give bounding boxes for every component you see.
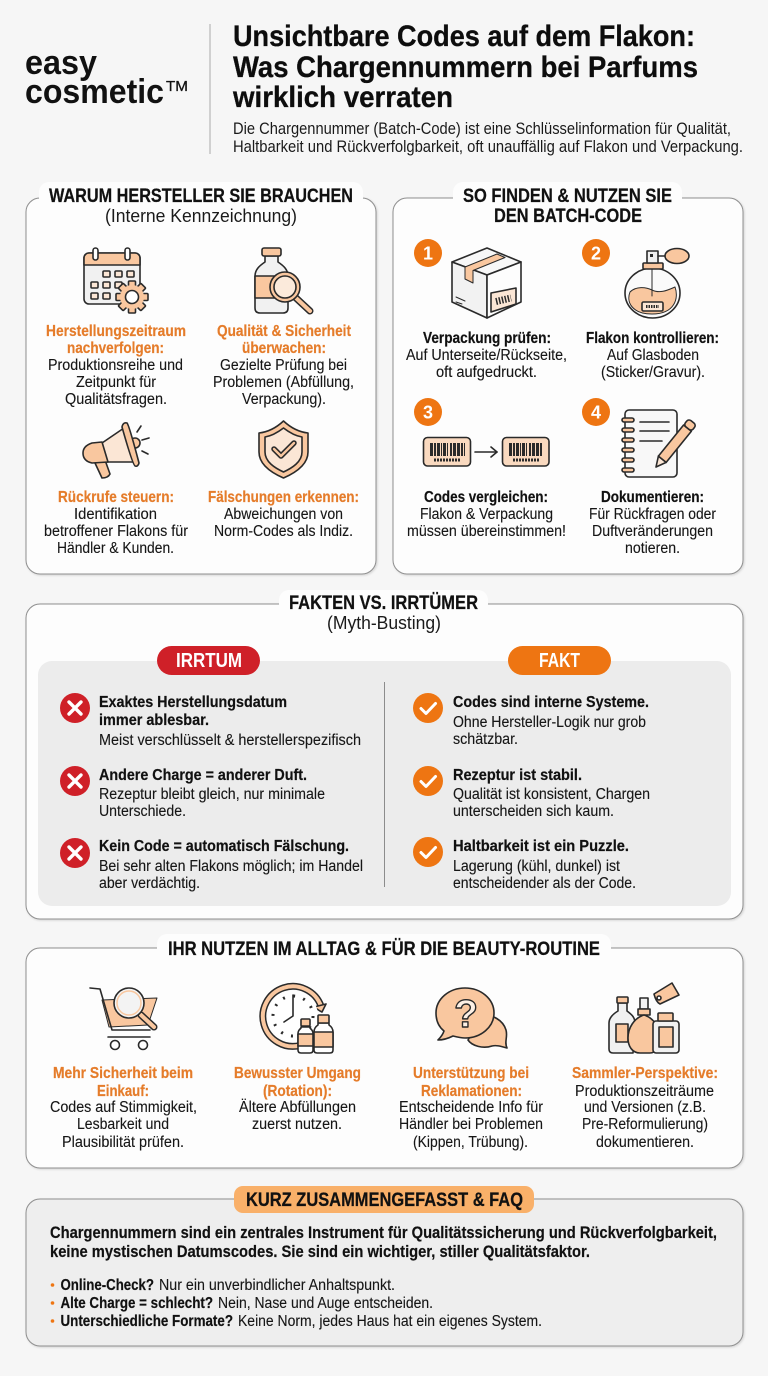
heading: so finden: SO FINDEN & NUTZEN SIE xyxy=(463,185,672,207)
icon: shield xyxy=(259,421,308,478)
myth 3 xyxy=(99,838,363,892)
icon: calendar with gear xyxy=(84,248,148,313)
text: mehr sicherheit: Codes auf Stimmigkeit, xyxy=(50,1099,197,1116)
text: faelschungen: Fälschungen erkennen: xyxy=(208,489,359,506)
text: codes vergleichen: Codes vergleichen: xyxy=(424,489,548,506)
logo: easy xyxy=(25,44,97,82)
fact 1: schätzbar. xyxy=(453,731,518,748)
fact 1 xyxy=(453,694,649,748)
badge 4 xyxy=(582,398,610,426)
text: bewusster umgang: (Rotation): xyxy=(263,1083,332,1100)
text: qualitaet und sicherheit: überwachen: xyxy=(242,340,326,357)
myth 3: Kein Code = automatisch Fälschung. xyxy=(99,838,349,855)
myth 1: immer ablesbar. xyxy=(99,712,209,729)
subtitle xyxy=(233,120,743,156)
text: unterstuetzung: Händler bei Problemen xyxy=(399,1116,543,1133)
panel: warum hersteller sie brauchen xyxy=(26,182,376,574)
badge 2 xyxy=(582,239,610,267)
heading: warum hersteller: WARUM HERSTELLER SIE BRAUCHEN xyxy=(49,185,353,207)
text: sammler-perspektive: Produktionszeiträume xyxy=(575,1083,714,1100)
text: rueckrufe: Identifikation xyxy=(74,506,157,523)
badge 1: 1 xyxy=(423,244,433,264)
title xyxy=(232,20,698,114)
text: flakon kontrollieren xyxy=(586,330,719,381)
text: verpackung pruefen xyxy=(406,330,567,381)
text: mehr sicherheit xyxy=(50,1065,197,1151)
icon: shopping cart with magnifier xyxy=(90,988,157,1050)
faq list: Unterschiedliche Formate? xyxy=(60,1313,233,1330)
faq list xyxy=(51,1277,542,1330)
comparison background xyxy=(38,661,731,906)
fact 2: unterscheiden sich kaum. xyxy=(453,803,614,820)
text: bewusster umgang: Bewusster Umgang xyxy=(234,1065,361,1082)
icon: orange check 3 xyxy=(413,837,443,867)
heading: so finden xyxy=(463,185,672,227)
fact 2: Qualität ist konsistent, Chargen xyxy=(453,786,650,803)
text: dokumentieren: notieren. xyxy=(625,540,680,557)
faq list: Online-Check? xyxy=(60,1277,154,1294)
text: verpackung pruefen: Verpackung prüfen: xyxy=(423,330,551,347)
icon: notebook and pen xyxy=(622,410,696,477)
heading: warum hersteller xyxy=(49,185,353,226)
panel: fakten vs irrtuemer xyxy=(26,590,743,919)
header xyxy=(25,20,743,156)
icon: speech bubbles with question mark: ? xyxy=(454,993,478,1036)
badge 3 xyxy=(414,398,442,426)
text: herstellungszeitraum: Herstellungszeitraum xyxy=(46,323,186,340)
fact 3: Haltbarkeit ist ein Puzzle. xyxy=(453,838,629,855)
icon: orange check 2 xyxy=(413,766,443,796)
heading: fakten vs irrtuemer: (Myth-Busting) xyxy=(327,613,441,633)
text: rueckrufe: betroffener Flakons für xyxy=(44,523,188,540)
icon: red cross 1 xyxy=(60,693,90,723)
myth 3: Bei sehr alten Flakons möglich; im Handel xyxy=(99,858,363,875)
myth 2 xyxy=(99,767,325,820)
myth 2: Andere Charge = anderer Duft. xyxy=(99,767,307,784)
text: sammler-perspektive: und Versionen (z.B. xyxy=(584,1099,706,1116)
text: unterstuetzung: Unterstützung bei xyxy=(413,1065,529,1082)
title: Was Chargennummern bei Parfums xyxy=(233,51,698,84)
icon: red cross 3 xyxy=(60,838,90,868)
text: rueckrufe xyxy=(44,489,188,557)
icon: package box xyxy=(452,248,521,318)
text: flakon kontrollieren: (Sticker/Gravur). xyxy=(601,364,705,381)
text: herstellungszeitraum xyxy=(46,323,186,408)
badge: fakt: FAKT xyxy=(539,650,580,672)
fact 1: Ohne Hersteller-Logik nur grob xyxy=(453,714,646,731)
text: dokumentieren: Dokumentieren: xyxy=(601,489,704,506)
badge: fakt xyxy=(508,646,611,675)
badge: irrtum xyxy=(157,646,260,675)
text: dokumentieren: Duftveränderungen xyxy=(592,523,713,540)
text: qualitaet und sicherheit: Qualität & Sicherheit xyxy=(217,323,351,340)
text: codes vergleichen: Flakon & Verpackung xyxy=(420,506,553,523)
text: unterstuetzung: (Kippen, Trübung). xyxy=(413,1134,528,1151)
panel: ihr nutzen im alltag xyxy=(26,934,743,1168)
text: verpackung pruefen: Auf Unterseite/Rückseite, xyxy=(406,347,567,364)
text: rueckrufe: Händler & Kunden. xyxy=(57,540,174,557)
text: faelschungen: Norm-Codes als Indiz. xyxy=(214,523,353,540)
badge 1 xyxy=(414,239,442,267)
badge: irrtum: IRRTUM xyxy=(176,650,242,672)
icon: megaphone xyxy=(83,423,149,478)
icon: red cross 2 xyxy=(60,766,90,796)
faq list: Keine Norm, jedes Haus hat ein eigenes System. xyxy=(238,1313,542,1330)
text: qualitaet und sicherheit: Verpackung). xyxy=(242,391,326,408)
badge: kurz zusammengefasst: KURZ ZUSAMMENGEFASST & FAQ xyxy=(246,1189,523,1211)
badge 2: 2 xyxy=(591,244,601,264)
panel: kurz zusammengefasst und faq xyxy=(26,1186,743,1346)
myth 1: Meist verschlüsselt & herstellerspezifisch xyxy=(99,732,361,749)
text: bewusster umgang: zuerst nutzen. xyxy=(252,1116,342,1133)
text: qualitaet und sicherheit: Gezielte Prüfung bei xyxy=(220,357,347,374)
logo: cosmetic xyxy=(25,73,164,111)
myth 2: Rezeptur bleibt gleich, nur minimale xyxy=(99,786,325,803)
text: mehr sicherheit: Lesbarkeit und xyxy=(77,1116,169,1133)
title: wirklich verraten xyxy=(232,81,453,114)
text: sammler-perspektive: dokumentieren. xyxy=(596,1134,694,1151)
text: mehr sicherheit: Mehr Sicherheit beim xyxy=(53,1065,193,1082)
icon: orange check 1 xyxy=(413,693,443,723)
text: verpackung pruefen: oft aufgedruckt. xyxy=(436,364,537,381)
text: rueckrufe: Rückrufe steuern: xyxy=(58,489,174,506)
icon: speech bubbles with question mark xyxy=(436,988,507,1048)
fact 2: Rezeptur ist stabil. xyxy=(453,767,582,784)
text: dokumentieren xyxy=(589,489,716,557)
text: codes vergleichen: müssen übereinstimmen! xyxy=(407,523,566,540)
myth 1: Exaktes Herstellungsdatum xyxy=(99,694,287,711)
text: faelschungen xyxy=(208,489,359,540)
text: qualitaet und sicherheit xyxy=(213,323,354,408)
text: dokumentieren: Für Rückfragen oder xyxy=(589,506,716,523)
heading: ihr nutzen: IHR NUTZEN IM ALLTAG & FÜR DIE BEAUTY-ROUTINE xyxy=(168,937,600,960)
text: flakon kontrollieren: Flakon kontrollieren: xyxy=(586,330,719,347)
logo: TM xyxy=(166,78,188,95)
text: bewusster umgang xyxy=(234,1065,361,1133)
heading: so finden: DEN BATCH-CODE xyxy=(494,205,642,227)
summary text: keine mystischen Datumscodes. Sie sind ein wichtiger, stiller Qualitätsfaktor. xyxy=(50,1242,590,1261)
text: herstellungszeitraum: Produktionsreihe und xyxy=(48,357,183,374)
icon: perfume flacon xyxy=(625,248,689,318)
icon: perfume collection with tag xyxy=(609,983,679,1053)
panel: so finden und nutzen xyxy=(393,182,743,574)
text: unterstuetzung: Reklamationen: xyxy=(421,1083,522,1100)
text: flakon kontrollieren: Auf Glasboden xyxy=(607,347,699,364)
fact 3 xyxy=(453,838,636,892)
fact 3: Lagerung (kühl, dunkel) ist xyxy=(453,858,621,875)
text: qualitaet und sicherheit: Problemen (Abfüllung, xyxy=(213,374,354,391)
badge 4: 4 xyxy=(591,402,601,422)
fact 1: Codes sind interne Systeme. xyxy=(453,694,649,711)
icon: clock and bottles xyxy=(263,986,333,1053)
fact 3: entscheidender als der Code. xyxy=(453,875,636,892)
faq list: Nein, Nase und Auge entscheiden. xyxy=(218,1295,433,1312)
text: sammler-perspektive: Pre-Reformulierung) xyxy=(582,1116,708,1133)
icon: barcodes compared xyxy=(424,438,549,466)
faq list: Nur ein unverbindlicher Anhaltspunkt. xyxy=(159,1277,395,1294)
heading: fakten vs irrtuemer xyxy=(289,591,478,633)
faq list: Alte Charge = schlecht? xyxy=(60,1295,213,1312)
text: sammler-perspektive xyxy=(572,1065,718,1151)
text: codes vergleichen xyxy=(407,489,566,540)
text: herstellungszeitraum: Qualitätsfragen. xyxy=(65,391,167,408)
logo xyxy=(25,44,188,111)
text: faelschungen: Abweichungen von xyxy=(224,506,343,523)
text: mehr sicherheit: Einkauf: xyxy=(97,1083,149,1100)
summary text xyxy=(50,1223,717,1261)
heading: warum hersteller: (Interne Kennzeichnung) xyxy=(105,206,297,226)
myth 2: Unterschiede. xyxy=(99,803,186,820)
text: herstellungszeitraum: Zeitpunkt für xyxy=(76,374,156,391)
text: bewusster umgang: Ältere Abfüllungen xyxy=(239,1099,356,1116)
fact 2 xyxy=(453,767,650,820)
myth 3: aber verdächtig. xyxy=(99,875,200,892)
text: mehr sicherheit: Plausibilität prüfen. xyxy=(62,1134,184,1151)
text: sammler-perspektive: Sammler-Perspektive: xyxy=(572,1065,718,1082)
text: unterstuetzung: Entscheidende Info für xyxy=(399,1099,543,1116)
text: unterstuetzung xyxy=(399,1065,543,1151)
title: Unsichtbare Codes auf dem Flakon: xyxy=(233,20,695,53)
icon: bottle with magnifier xyxy=(255,248,310,313)
text: herstellungszeitraum: nachverfolgen: xyxy=(67,340,164,357)
myth 1 xyxy=(99,694,361,749)
badge 3: 3 xyxy=(423,402,433,422)
heading: fakten vs irrtuemer: FAKTEN VS. IRRTÜMER xyxy=(289,591,478,614)
